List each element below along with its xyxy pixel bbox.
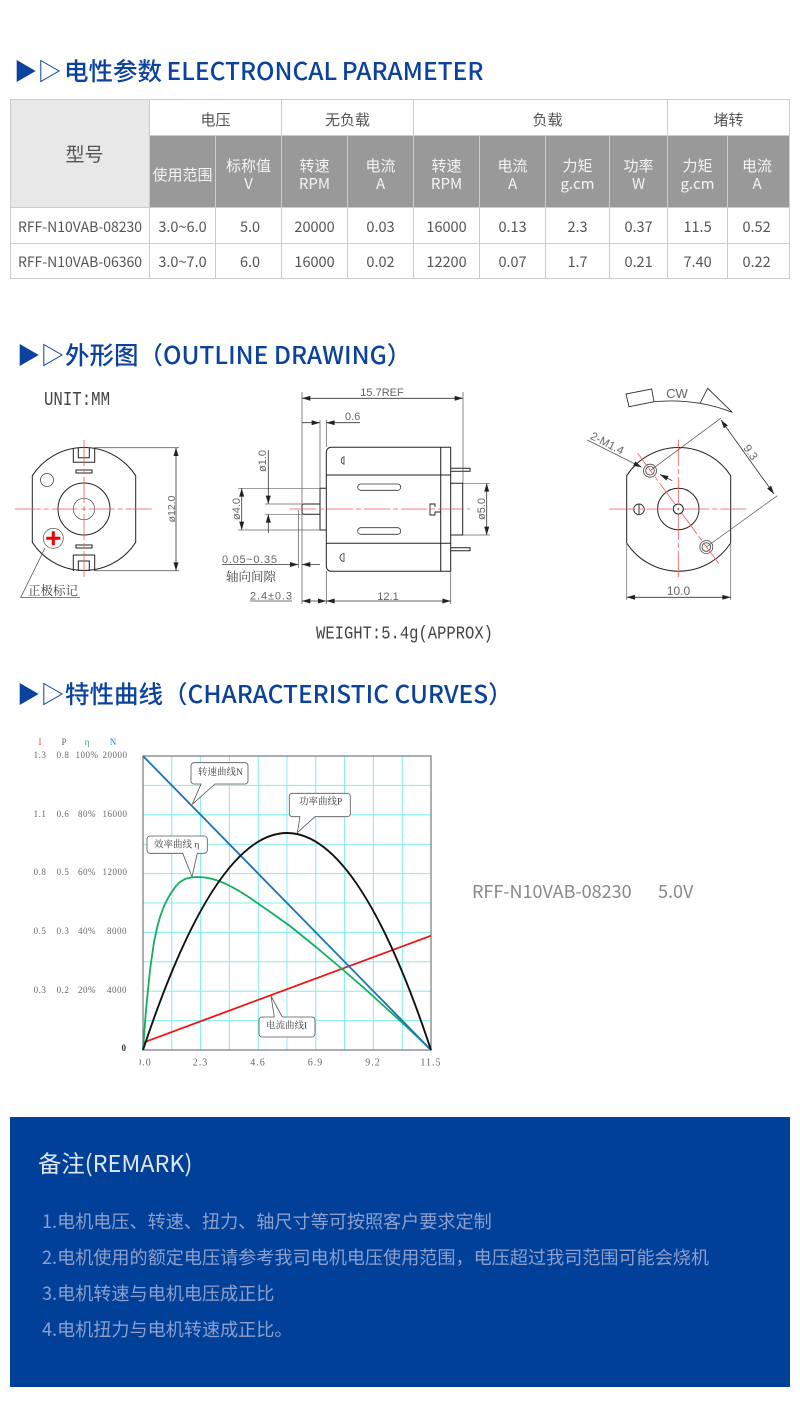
chart: characteristic curves [34, 737, 442, 1068]
heading: outline drawing: 外形图（OUTLINE DRAWING） [65, 337, 411, 372]
table: electrical parameters: A [508, 173, 517, 194]
remark heading: 备注(REMARK) [38, 1145, 192, 1179]
axis legend labels: I [38, 737, 42, 747]
drawing: side view: 12.1 [377, 591, 399, 603]
curve: power P [143, 833, 431, 1050]
drawing: side view: ø4.0 [231, 498, 243, 520]
x axis values: 9.2 [365, 1058, 381, 1068]
y axis values: 4000 [107, 985, 127, 995]
table: electrical parameters: RPM [431, 173, 462, 194]
drawing: side view [222, 387, 490, 604]
chart model label: RFF-N10VAB-08230 [472, 878, 632, 904]
y axis values: 0.3 [57, 926, 69, 936]
drawing: side view: 0.05~0.35 [222, 554, 277, 566]
curve: efficiency [143, 877, 431, 1050]
drawing: side view: 15.7REF [360, 387, 404, 399]
remark item 3: 3.电机转速与电机电压成正比 [42, 1280, 274, 1306]
drawing: side view: 0.6 [345, 411, 360, 423]
y axis values: 0.2 [57, 985, 69, 995]
x axis values: 2.3 [193, 1058, 208, 1068]
heading: electrical parameter: 电性参数 ELECTRONCAL PARAMETER [64, 53, 483, 88]
table: electrical parameters: 使用范围 [152, 164, 212, 185]
y axis values: 60% [78, 867, 96, 877]
y axis values: 16000 [102, 809, 128, 819]
y axis values: 1.3 [34, 750, 46, 760]
y axis values: 0.5 [57, 867, 69, 877]
table: electrical parameters: 11.5 [683, 216, 712, 236]
table: electrical parameters: 电流 [742, 155, 772, 176]
y axis values: 0.8 [57, 750, 69, 760]
axis legend labels [38, 737, 117, 747]
table: electrical parameters: 0.52 [742, 216, 771, 236]
table: electrical parameters: 力矩 [683, 155, 713, 176]
y axis values: 40% [78, 926, 96, 936]
y axis values: 100% [76, 750, 98, 760]
x axis values [136, 1056, 442, 1069]
y axis values: 1.1 [34, 809, 46, 819]
table: electrical parameters: 0.37 [624, 216, 653, 236]
drawing: side view: ø5.0 [476, 498, 488, 520]
table: electrical parameters: 0.07 [498, 251, 527, 272]
x axis values: 11.5 [420, 1058, 442, 1068]
drawing: front view: 正极标记 [28, 583, 79, 598]
table: electrical parameters: 3.0~7.0 [158, 251, 207, 272]
drawing: side view: 2.4±0.3 [250, 590, 292, 602]
table: electrical parameters: 16000 [294, 251, 335, 272]
table: electrical parameters: 电流 [498, 155, 528, 176]
drawing: side view: ø1.0 [257, 450, 269, 472]
drawing: rear view: CW [666, 386, 689, 401]
table: electrical parameters: RFF-N10VAB-06360 [18, 252, 142, 272]
table: electrical parameters: 堵转 [714, 109, 744, 130]
text: 5.0V [658, 878, 693, 904]
table: electrical parameters: 力矩 [563, 155, 593, 176]
remark item 4: 4.电机扭力与电机转速成正比。 [42, 1316, 293, 1342]
y axis values: 0.5 [34, 926, 46, 936]
table: electrical parameters: 标称值 [226, 155, 271, 176]
table: electrical parameters: 负载 [533, 109, 563, 130]
axis legend labels: P [61, 737, 67, 747]
table: electrical parameters: 5.0 [240, 216, 260, 236]
table: electrical parameters: g.cm [681, 173, 715, 194]
y axis values: 0.3 [34, 985, 46, 995]
table: electrical parameters: 电压 [200, 109, 231, 130]
table: electrical parameters: 功率 [624, 155, 654, 176]
drawing: rear view: 9.3 [740, 443, 759, 463]
callout: power curve [289, 793, 350, 833]
table: electrical parameters: g.cm [561, 173, 595, 194]
y axis values [34, 750, 128, 1053]
table: electrical parameters: 1.7 [567, 251, 588, 272]
y axis values: 8000 [107, 926, 127, 936]
table: electrical parameters: 12200 [426, 251, 467, 272]
table: electrical parameters [10, 99, 790, 279]
drawing: side view: 轴向间隙 [226, 569, 277, 584]
axis legend labels: N [110, 737, 117, 747]
table: electrical parameters: 7.40 [683, 251, 712, 272]
outline drawings [14, 386, 778, 644]
table: electrical parameters: W [632, 173, 645, 194]
table: electrical parameters: RFF-N10VAB-08230 [18, 216, 142, 236]
y axis values: 12000 [102, 867, 128, 877]
drawing: front view: ø12.0 [166, 495, 178, 522]
callout: current curve [259, 996, 315, 1037]
table: electrical parameters: 电流 [366, 155, 396, 176]
y axis values: 0.6 [57, 809, 69, 819]
remark item 1: 1.电机电压、转速、扭力、轴尺寸等可按照客户要求定制 [42, 1208, 492, 1234]
table: electrical parameters: A [376, 173, 385, 194]
callout: speed curve [191, 763, 248, 804]
axis legend labels: η [85, 737, 90, 747]
table: electrical parameters: 0.03 [366, 216, 395, 236]
callout: current curve: 电流曲线I [266, 1020, 307, 1032]
y axis values: 0.8 [34, 867, 46, 877]
table: electrical parameters: 转速 [300, 155, 330, 176]
table: electrical parameters: 0.13 [498, 216, 527, 236]
weight label: WEIGHT:5.4g(APPROX) [316, 624, 493, 644]
table: electrical parameters: 型号 [65, 140, 104, 166]
curve: current I [143, 936, 431, 1043]
curve: speed N [143, 756, 431, 1050]
table: electrical parameters: RPM [299, 173, 330, 194]
table: electrical parameters: 0.21 [624, 251, 653, 272]
drawing: rear view [587, 386, 777, 600]
x axis values: 4.6 [250, 1058, 266, 1068]
drawing: front view: UNIT:MM [44, 389, 110, 411]
y axis values: 20000 [102, 750, 128, 760]
drawing: rear view: 2-M1.4 [588, 430, 626, 458]
remark item 2: 2.电机使用的额定电压请参考我司电机电压使用范围，电压超过我司范围可能会烧机 [42, 1244, 709, 1270]
callout: efficiency curve [147, 836, 207, 877]
table: electrical parameters: 3.0~6.0 [158, 216, 207, 236]
table: electrical parameters: 20000 [294, 216, 335, 236]
y axis values: 80% [78, 809, 96, 819]
table: electrical parameters: V [244, 173, 253, 194]
y axis values: 20% [78, 985, 96, 995]
table: electrical parameters: 转速 [432, 155, 462, 176]
plot grid [143, 756, 431, 1050]
table: electrical parameters: 2.3 [567, 216, 588, 236]
table: electrical parameters: 16000 [426, 216, 467, 236]
callout: efficiency curve: 效率曲线 η [154, 838, 199, 850]
table: electrical parameters: 0.22 [742, 251, 771, 272]
drawing: front view [15, 389, 179, 598]
y axis values: 0 [122, 1043, 126, 1053]
x axis values: 6.9 [308, 1058, 323, 1068]
table: electrical parameters: A [752, 173, 762, 194]
heading: characteristic curves: 特性曲线（CHARACTERISTIC CURVES） [65, 676, 513, 711]
callout: speed curve: 转速曲线N [198, 766, 243, 778]
table: electrical parameters: 6.0 [240, 251, 260, 272]
panel: remark [10, 1117, 790, 1387]
table: electrical parameters: 0.02 [366, 251, 395, 272]
table: electrical parameters: 无负载 [325, 109, 370, 130]
x axis values: 0.0 [136, 1058, 152, 1068]
callout: power curve: 功率曲线P [299, 796, 342, 808]
drawing: rear view: 10.0 [667, 584, 691, 598]
